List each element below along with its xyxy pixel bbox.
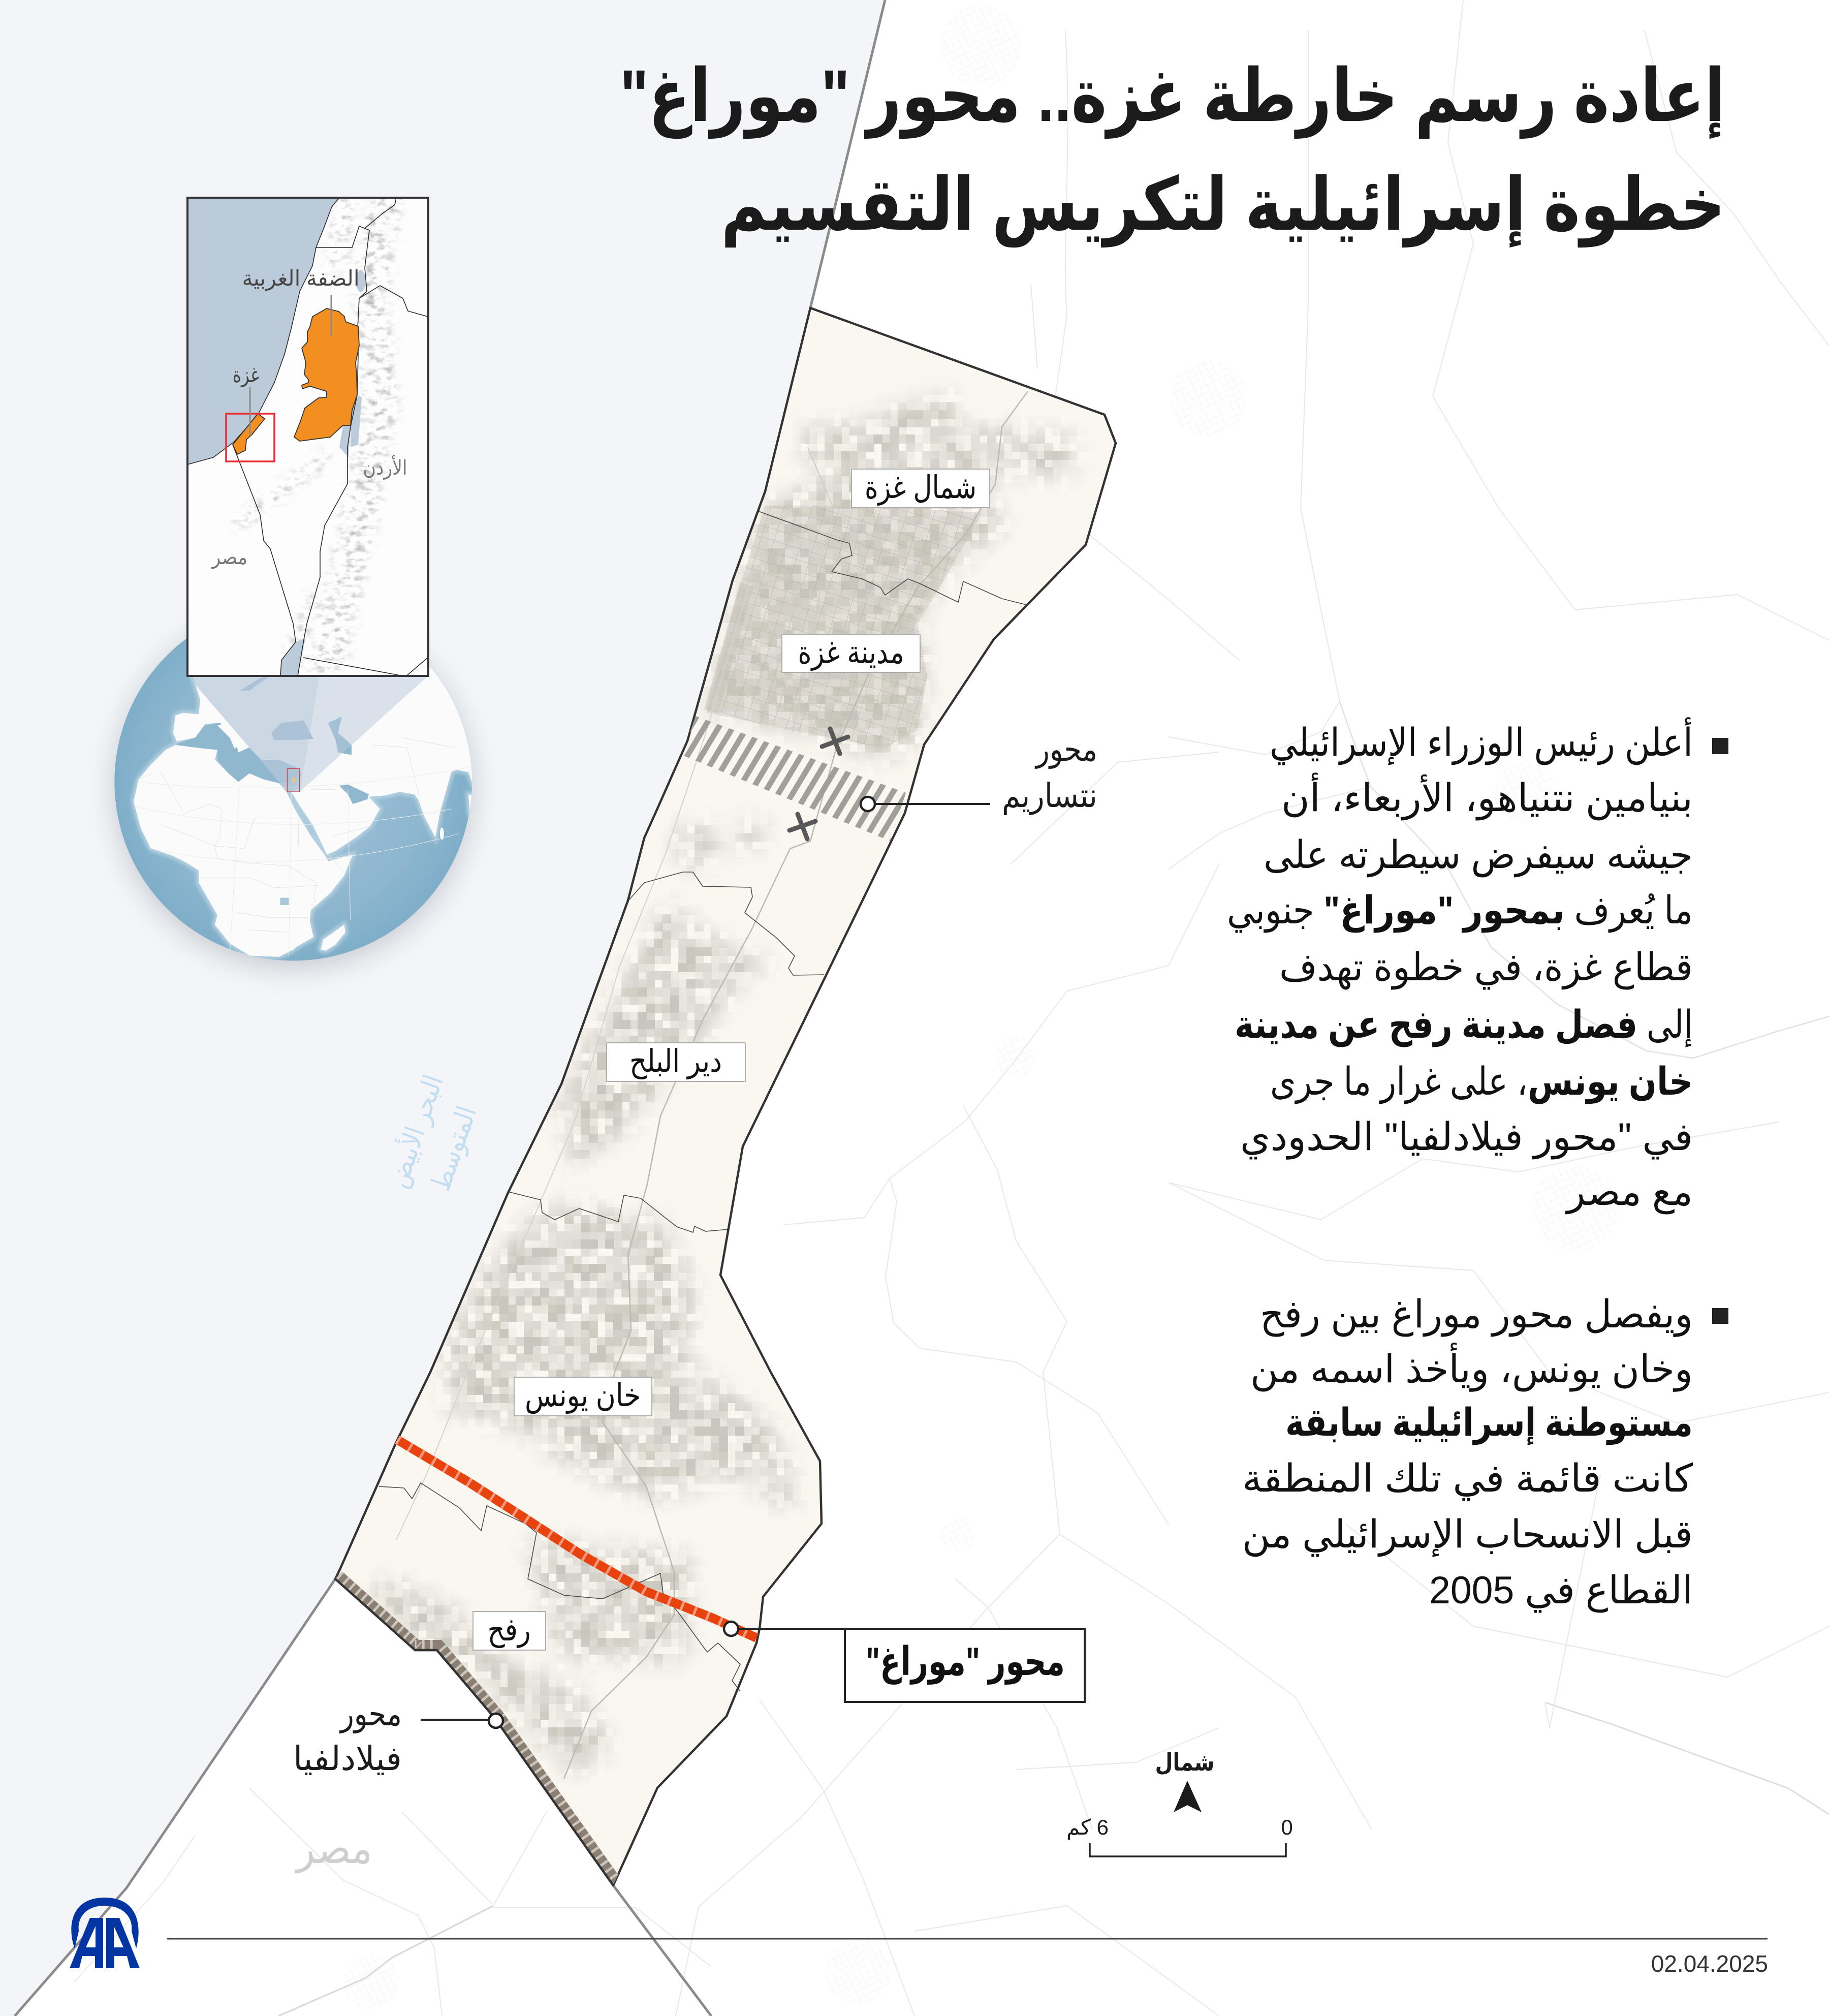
label: gaza: غزة	[233, 363, 259, 387]
terrain hillshade	[239, 198, 386, 676]
gaza outline	[335, 308, 1116, 1885]
bullet 2	[1712, 1308, 1728, 1324]
title	[620, 55, 1725, 248]
paragraph 2	[1242, 1293, 1728, 1613]
inset map	[187, 198, 441, 676]
north arrow	[1155, 1749, 1214, 1812]
paragraph 2: ويفصل محور موراغ بين رفح	[1260, 1293, 1693, 1337]
callout: morag	[724, 1622, 1085, 1702]
philadelphi corridor	[335, 1579, 613, 1885]
paragraph 1: مع مصر	[1565, 1170, 1693, 1215]
paragraph 1: قطاع غزة، في خطوة تهدف	[1279, 946, 1693, 990]
west bank	[294, 308, 359, 441]
checkpoint cross markers	[790, 729, 848, 839]
callout: philadelphi: فيلادلفيا	[293, 1740, 402, 1777]
logo: anadolu agency	[70, 1898, 140, 1968]
governorate borders	[379, 511, 1026, 1691]
coastal shelf	[134, 605, 476, 957]
paragraph 1: إلى فصل مدينة رفح عن مدينة	[1235, 1003, 1693, 1047]
scale bar: 0	[1281, 1815, 1293, 1839]
scale bar	[1066, 1815, 1293, 1856]
paragraph 1	[1227, 717, 1728, 1215]
city label: gaza city: مدينة غزة	[798, 635, 904, 671]
red locator box	[226, 414, 274, 461]
date: 02.04.2025	[1651, 1950, 1768, 1977]
city label: north gaza: شمال غزة	[865, 470, 976, 506]
main roads	[396, 391, 1028, 1779]
label: mediterranean sea: البحر الأبيض	[380, 1070, 450, 1192]
label: egypt: مصر	[294, 1824, 372, 1874]
paragraph 1: بنيامين نتنياهو، الأربعاء، أن	[1281, 772, 1693, 821]
paragraph 1: أعلن رئيس الوزراء الإسرائيلي	[1270, 717, 1693, 765]
inset frame	[187, 198, 428, 676]
locator globe	[114, 603, 476, 961]
paragraph 1: جيشه سيفرض سيطرته على	[1264, 833, 1693, 878]
paragraph 1: خان يونس، على غرار ما جرى	[1270, 1060, 1693, 1104]
ocean	[114, 603, 472, 961]
paragraph 2: قبل الانسحاب الإسرائيلي من	[1242, 1513, 1693, 1557]
italy and sri lanka	[217, 724, 444, 840]
sea	[187, 198, 339, 464]
label: mediterranean sea	[380, 1070, 483, 1195]
callout: netzarim: نتساريم	[1002, 777, 1097, 815]
view cone right facet	[300, 676, 428, 792]
morag corridor	[397, 1440, 756, 1638]
coastline and Egypt border	[15, 0, 885, 2016]
view cone left facet	[188, 676, 320, 792]
coastal dense strip	[711, 584, 747, 711]
coast and borders	[187, 198, 428, 676]
label: west bank: الضفة الغربية	[242, 266, 360, 291]
background: settlement street patches	[343, 5, 1618, 2010]
city label: rafah	[473, 1611, 546, 1650]
callout: netzarim	[861, 730, 1097, 815]
borders and graticule	[134, 737, 471, 957]
location marker	[287, 769, 300, 792]
netzarim corridor hatching	[682, 716, 906, 841]
callout: netzarim: محور	[1034, 730, 1097, 769]
callout: philadelphi	[293, 1695, 503, 1777]
paragraph 2: القطاع في 2005	[1429, 1569, 1693, 1613]
gulf of aqaba and lakes	[280, 270, 441, 676]
land masses	[134, 605, 476, 957]
inland seas	[177, 673, 369, 905]
gaza strip	[233, 414, 265, 454]
city label: rafah: رفح	[488, 1612, 530, 1648]
sea area	[0, 0, 885, 2016]
callout: philadelphi: محور	[339, 1695, 402, 1733]
leader lines	[250, 295, 331, 435]
footer rule	[167, 1938, 1768, 1939]
paragraph 2: كانت قائمة في تلك المنطقة	[1242, 1457, 1693, 1501]
label: mediterranean sea: المتوسط	[425, 1102, 483, 1195]
callout: morag: محور "موراغ"	[866, 1639, 1065, 1685]
city label: deir al-balah: دير البلح	[629, 1044, 722, 1079]
bullet 1	[1712, 738, 1728, 754]
urban density texture	[376, 390, 1073, 1779]
scale bar: 6 كم	[1066, 1815, 1109, 1840]
label: egypt: مصر	[211, 546, 247, 569]
city label: khan younis: خان يونس	[525, 1378, 641, 1414]
paragraph 2: وخان يونس، ويأخذ اسمه من	[1250, 1343, 1693, 1392]
gaza strip territory	[335, 308, 1116, 1885]
gaza city street grid	[707, 506, 982, 748]
philadelphi border edge	[335, 1579, 613, 1885]
north arrow: شمال	[1155, 1749, 1214, 1776]
paragraph 1: في "محور فيلادلفيا" الحدودي	[1240, 1115, 1693, 1160]
label: jordan: الأردن	[363, 455, 407, 480]
paragraph 2: مستوطنة إسرائيلية سابقة	[1285, 1401, 1693, 1445]
globe shadow	[114, 610, 472, 968]
paragraph 1: ما يُعرف بمحور "موراغ" جنوبي	[1227, 889, 1693, 933]
